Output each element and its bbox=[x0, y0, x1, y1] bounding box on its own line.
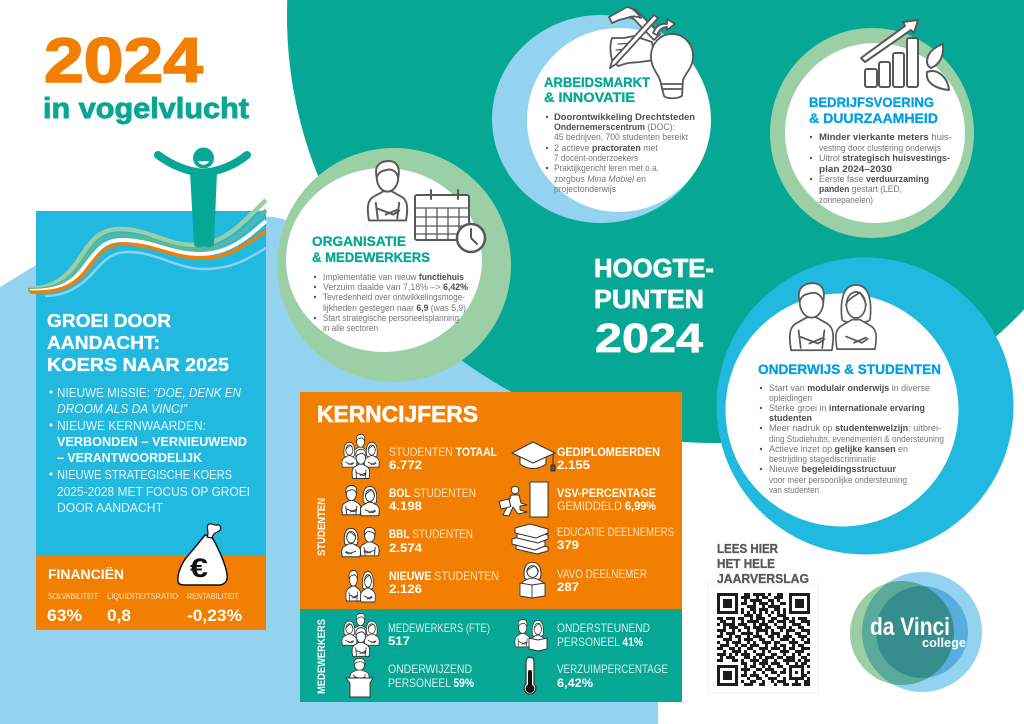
panel heading: AANDACHT: bbox=[47, 332, 160, 353]
key figures: 2.155 bbox=[557, 458, 590, 472]
light blue background shape bbox=[0, 217, 680, 724]
panel bullets: NIEUWE STRATEGISCHE KOERS bbox=[57, 467, 232, 482]
bullets: van studenten bbox=[769, 484, 819, 495]
key figures: GEMIDDELD 6,99% bbox=[557, 499, 656, 513]
bullets: projectonderwijs bbox=[554, 183, 616, 194]
bullets: Start van modulair onderwijs in diverse bbox=[769, 382, 930, 393]
key figures: BOL STUDENTEN bbox=[389, 486, 476, 500]
financien figures: SOLVABILITEIT bbox=[48, 591, 98, 601]
heading: hoogtepunten 2024: HOOGTE- bbox=[594, 253, 714, 283]
key figures: 379 bbox=[557, 538, 579, 552]
bullets bbox=[760, 382, 944, 495]
icon: growth bars and leaves bbox=[861, 20, 949, 90]
bullets: opleidingen bbox=[769, 392, 812, 403]
heading: & INNOVATIE bbox=[544, 89, 635, 105]
heading: ONDERWIJS & STUDENTEN bbox=[758, 361, 941, 377]
QR code bbox=[708, 584, 818, 693]
key figures bbox=[389, 445, 674, 596]
heading bbox=[312, 233, 430, 265]
bullets: Tevredenheid over ontwikkelingsmoge- bbox=[323, 291, 465, 302]
panel bullets: NIEUWE KERNWAARDEN: bbox=[57, 418, 206, 433]
bullets: zonnepanelen) bbox=[819, 194, 873, 205]
bullets bbox=[810, 131, 952, 205]
title: 2024 bbox=[44, 26, 203, 96]
heading: & MEDEWERKERS bbox=[312, 249, 430, 265]
bullets: Minder vierkante meters huis- bbox=[819, 131, 952, 142]
teal background circle bbox=[287, 0, 1024, 443]
icon: student leaving through door bbox=[499, 482, 548, 517]
financien figures: FINANCIËN bbox=[48, 566, 124, 582]
financien figures bbox=[47, 566, 242, 625]
key figures: VAVO DEELNEMER bbox=[557, 567, 647, 581]
panel bullets: – VERANTWOORDELIJK bbox=[57, 450, 203, 465]
bullets: Uitrol strategisch huisvestings- bbox=[819, 152, 950, 163]
financien figures: LIQUIDITEITSRATIO bbox=[107, 591, 178, 601]
panel: organisatie en medewerkers bbox=[277, 148, 511, 382]
staff figures: VERZUIMPERCENTAGE bbox=[557, 662, 668, 676]
key figures: 287 bbox=[557, 580, 579, 594]
staff figures: PERSONEEL 59% bbox=[388, 676, 474, 690]
key figures: STUDENTEN TOTAAL bbox=[389, 445, 497, 459]
bullets: ding Studiehubs, evenementen & ondersteuning bbox=[769, 433, 944, 444]
key figures: 6.772 bbox=[389, 458, 422, 472]
bullets: Ondernemerscentrum (DOC): bbox=[554, 121, 675, 132]
panel: onderwijs en studenten bbox=[716, 258, 1014, 554]
panel bullets: VERBONDEN – VERNIEUWEND bbox=[57, 434, 247, 449]
bullets: Meer nadruk op studentenwelzijn: uitbrei- bbox=[769, 422, 941, 433]
bullets: voor meer persoonlijke ondersteuning bbox=[769, 474, 907, 485]
staff figures: ONDERWIJZEND bbox=[388, 662, 472, 676]
panel: kerncijfers studenten bbox=[300, 392, 682, 609]
icon: cheering person bbox=[158, 148, 247, 247]
bullets: 2 actieve practoraten met bbox=[554, 142, 658, 153]
panel heading: KOERS NAAR 2025 bbox=[47, 354, 229, 375]
heading: hoogtepunten 2024: 2024 bbox=[595, 315, 703, 361]
icon: person with calendar and clock bbox=[368, 161, 485, 252]
icon: student reading bbox=[520, 562, 545, 598]
icon: staff group bbox=[342, 613, 379, 656]
heading: ORGANISATIE bbox=[312, 233, 406, 249]
bullets: zorgbus Mina Mobiel en bbox=[554, 173, 646, 184]
icon: graduation cap bbox=[512, 442, 555, 471]
icon: support staff with book bbox=[515, 619, 547, 651]
bullets: Implementatie van nieuw functiehuis bbox=[323, 271, 464, 282]
panel: financien bbox=[36, 524, 266, 630]
side label: MEDEWERKERS bbox=[316, 619, 328, 694]
icon: hammer, hand, pencil and bulb bbox=[609, 7, 693, 98]
text: lees hier het hele jaarverslag bbox=[717, 541, 809, 586]
title bbox=[43, 26, 249, 125]
key figures: NIEUWE STUDENTEN bbox=[389, 569, 499, 583]
key figures: GEDIPLOMEERDEN bbox=[557, 445, 660, 459]
bullets: Doorontwikkeling Drechtsteden bbox=[554, 111, 695, 122]
bullets: plan 2024–2030 bbox=[819, 163, 892, 174]
bullets: lijkheden gestegen naar 6,9 (was 5,9) bbox=[323, 302, 466, 313]
bullets: in alle sectoren bbox=[323, 322, 378, 333]
bullets: Verzuim daalde van 7,18% –> 6,42% bbox=[323, 281, 469, 292]
panel bullets: DOOR AANDACHT bbox=[57, 500, 163, 515]
bullets: panden gestart (LED, bbox=[819, 183, 902, 194]
heading: hoogtepunten 2024 bbox=[594, 253, 714, 361]
bullets bbox=[314, 271, 469, 333]
panel bullets: 2025-2028 MET FOCUS OP GROEI bbox=[57, 484, 250, 499]
financien figures: -0,23% bbox=[187, 607, 242, 625]
panel bullets: NIEUWE MISSIE: “DOE, DENK EN bbox=[57, 385, 242, 400]
side label: STUDENTEN bbox=[316, 498, 328, 556]
bullets: Eerste fase verduurzaming bbox=[819, 173, 929, 184]
heading: & DUURZAAMHEID bbox=[809, 110, 938, 126]
bullets bbox=[546, 111, 695, 194]
staff figures: PERSONEEL 41% bbox=[557, 635, 643, 649]
panel bullets bbox=[50, 385, 250, 515]
bullets: Actieve inzet op gelijke kansen en bbox=[769, 443, 908, 454]
text: lees hier het hele jaarverslag: JAARVERSLAG bbox=[717, 571, 809, 586]
logo: da Vinci college: college bbox=[922, 636, 966, 650]
logo: da Vinci college: da Vinci bbox=[870, 613, 950, 641]
bullets: Start strategische personeelsplanning bbox=[323, 312, 459, 323]
bullets: studenten bbox=[769, 412, 812, 423]
key figures: EDUCATIE DEELNEMERS bbox=[557, 525, 674, 539]
text: lees hier het hele jaarverslag: LEES HIER bbox=[717, 541, 779, 556]
icon: money bag: € bbox=[190, 553, 208, 583]
panel: bedrijfsvoering en duurzaamheid bbox=[770, 20, 974, 238]
key figures: 4.198 bbox=[389, 499, 422, 513]
panel bullets: DROOM ALS DA VINCI” bbox=[57, 401, 188, 416]
icon: stack of books bbox=[512, 524, 548, 554]
bullets: Sterke groei in internationale ervaring bbox=[769, 402, 925, 413]
text: lees hier het hele jaarverslag: HET HELE bbox=[717, 556, 775, 571]
title: in vogelvlucht bbox=[43, 93, 249, 125]
staff figures: MEDEWERKERS (FTE) bbox=[388, 621, 490, 635]
heading: KERNCIJFERS bbox=[317, 401, 478, 427]
key figures: BBL STUDENTEN bbox=[389, 527, 473, 541]
heading bbox=[809, 94, 938, 126]
key figures: 2.126 bbox=[389, 582, 422, 596]
key figures: VSV-PERCENTAGE bbox=[557, 486, 656, 500]
bullets: Praktijkgericht leren met o.a. bbox=[554, 162, 659, 173]
heading: ARBEIDSMARKT bbox=[544, 74, 650, 90]
staff figures bbox=[388, 621, 668, 690]
bullets: vesting door clustering onderwijs bbox=[819, 142, 941, 153]
staff figures: 517 bbox=[388, 634, 410, 648]
panel: groei door aandacht bbox=[28, 200, 266, 555]
heading: hoogtepunten 2024: PUNTEN bbox=[594, 284, 704, 314]
bullets: 45 bedrijven, 700 studenten bereikt bbox=[554, 131, 688, 142]
heading: BEDRIJFSVOERING bbox=[809, 94, 934, 110]
financien figures: 63% bbox=[47, 607, 82, 625]
financien figures: RENTABILITEIT bbox=[187, 591, 239, 601]
icon: money bag bbox=[178, 524, 227, 585]
staff figures: 6,42% bbox=[557, 676, 593, 690]
financien figures: 0,8 bbox=[107, 607, 131, 625]
bullets: 7 docent-onderzoekers bbox=[554, 152, 638, 163]
icons: student groups bbox=[342, 434, 379, 602]
panel: arbeidsmarkt en innovatie bbox=[492, 7, 711, 223]
panel: kerncijfers medewerkers bbox=[300, 609, 682, 702]
icon: teacher at lectern bbox=[346, 658, 373, 697]
bullets: bestrijding stagediscriminatie bbox=[769, 453, 876, 464]
key figures: 2.574 bbox=[389, 541, 422, 555]
icon: thermometer bbox=[524, 657, 536, 694]
icon: two students bbox=[790, 283, 876, 350]
staff figures: ONDERSTEUNEND bbox=[557, 621, 650, 635]
wave ribbon bbox=[28, 200, 266, 296]
logo: da Vinci college bbox=[850, 572, 982, 692]
panel heading: GROEI DOOR bbox=[47, 310, 171, 331]
panel heading bbox=[47, 310, 229, 375]
heading bbox=[544, 74, 650, 105]
bullets: Nieuwe begeleidingsstructuur bbox=[769, 463, 896, 474]
